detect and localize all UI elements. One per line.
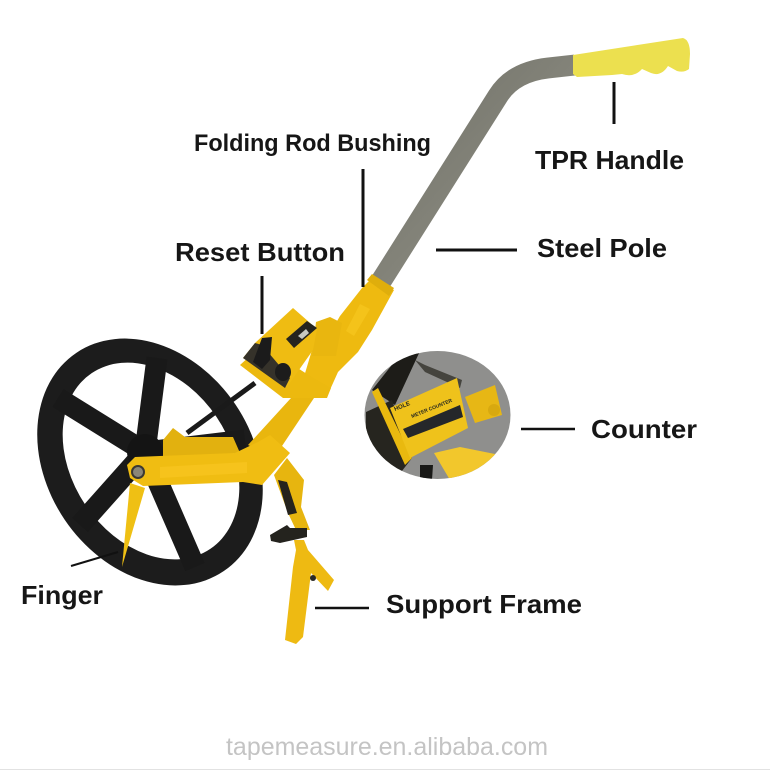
leader: Reset Button	[260, 276, 264, 334]
reset knob	[253, 337, 272, 369]
leader: Steel Pole	[436, 248, 517, 252]
leader: Folding Rod Bushing	[362, 169, 364, 287]
counter box	[243, 308, 317, 387]
support leg	[270, 458, 334, 644]
counter brand text: HOLE	[394, 401, 411, 413]
label: Counter: Counter	[591, 414, 697, 444]
knob panel	[243, 343, 290, 388]
main arm	[127, 435, 290, 486]
label: Reset Button: Reset Button	[175, 237, 345, 267]
back bracket	[312, 317, 342, 356]
measuring wheel	[0, 38, 690, 644]
counter bracket	[240, 345, 331, 398]
watermark: tapemeasure.en.alibaba.com	[226, 733, 548, 761]
sleeve collar	[367, 274, 394, 296]
label: Steel Pole: Steel Pole	[537, 233, 667, 263]
label: TPR Handle: TPR Handle	[535, 145, 684, 175]
lower sleeve	[300, 280, 394, 392]
finger pointer line	[71, 552, 118, 566]
leader: Support Frame	[315, 607, 369, 609]
axle bolt	[132, 466, 144, 478]
main neck	[248, 398, 314, 458]
counter close-up photo	[364, 351, 510, 480]
finger	[122, 483, 145, 567]
counter display	[286, 321, 317, 348]
counter model text: METER COUNTER	[411, 398, 454, 420]
rear arm	[163, 428, 240, 458]
label: Folding Rod Bushing: Folding Rod Bushing	[194, 130, 431, 157]
TPR handle	[573, 38, 690, 77]
leader: TPR Handle	[612, 82, 616, 124]
label: Support Frame: Support Frame	[386, 589, 582, 619]
label: Finger: Finger	[21, 580, 103, 610]
steel pole	[378, 65, 575, 286]
second knob	[275, 363, 291, 381]
wheel	[0, 295, 309, 629]
leader: Counter	[521, 428, 575, 430]
